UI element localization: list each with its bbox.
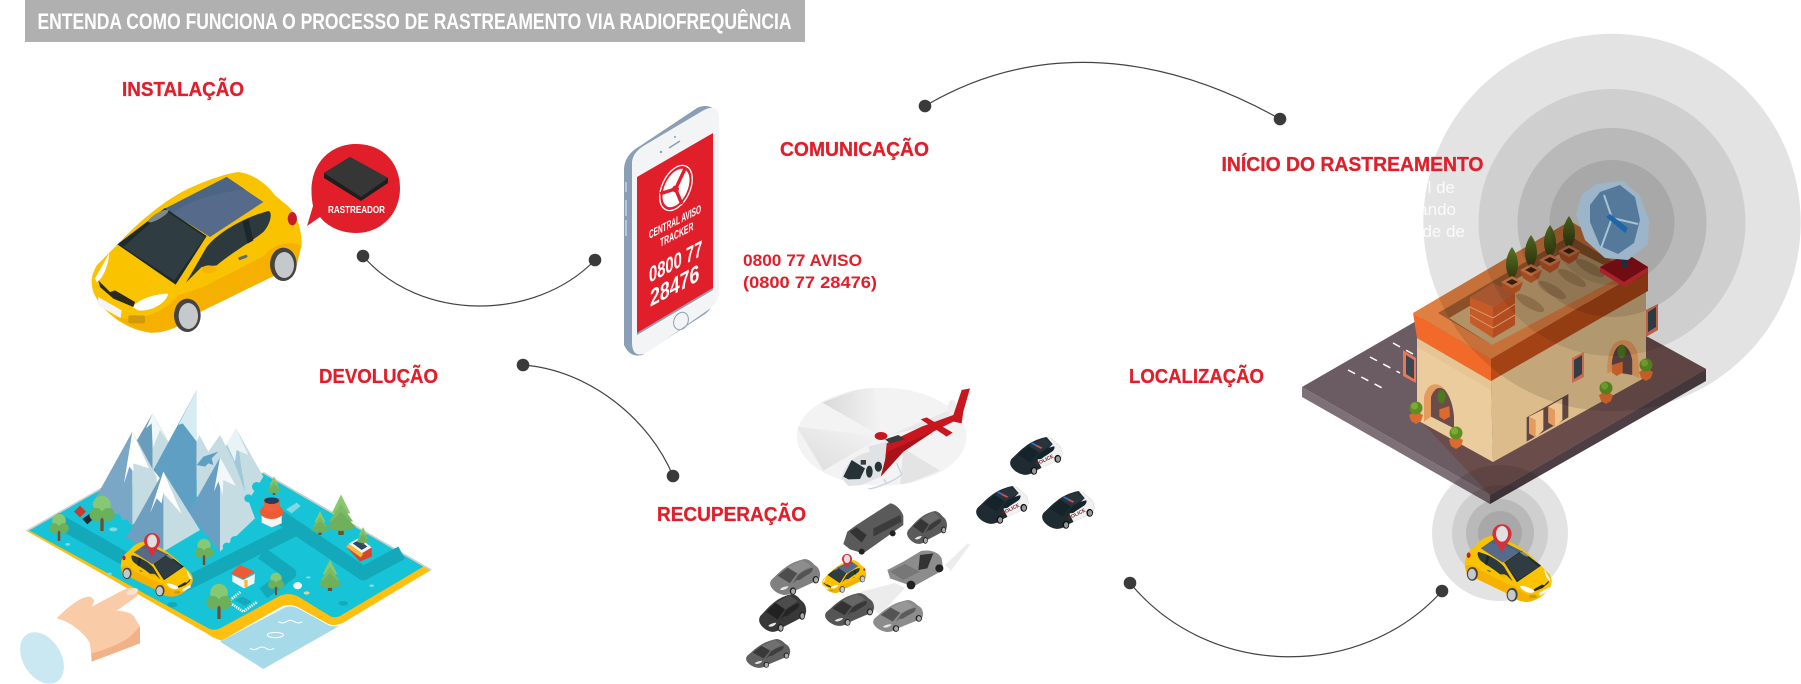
connector: instalação to comunicação	[357, 250, 601, 306]
title bar	[25, 0, 805, 42]
icon: tracker logo	[653, 160, 699, 216]
house	[231, 565, 255, 588]
phone number	[743, 251, 877, 292]
police cars	[976, 437, 1094, 529]
label: rastreador: RASTREADOR	[328, 205, 386, 216]
tail and fuselage	[881, 388, 970, 477]
roads	[55, 515, 402, 593]
icon: pointing hand	[11, 587, 140, 684]
icon: smartphone	[624, 106, 719, 356]
icon: tracker chip	[324, 157, 388, 201]
tower	[260, 497, 283, 527]
grey traffic cars	[746, 503, 947, 668]
traffic shadows	[860, 543, 970, 615]
connector: comunicação to início do rastreamento	[919, 62, 1286, 125]
icon: building with platform	[1302, 216, 1706, 504]
connector: recuperação to devolução	[517, 359, 679, 482]
faded body text on rings: l de	[1428, 178, 1455, 197]
title bar: ENTENDA COMO FUNCIONA O PROCESSO DE RASTREAMENTO VIA RADIOFREQUÊNCIA	[38, 9, 792, 34]
heading: localização: LOCALIZAÇÃO	[1129, 365, 1264, 388]
phone text: CENTRAL AVISO	[649, 203, 701, 243]
phone text: TRACKER	[660, 220, 694, 251]
phone number: (0800 77 28476)	[743, 273, 877, 292]
right arch	[1607, 340, 1639, 378]
phone text: 28476	[650, 259, 699, 312]
heading: instalação: INSTALAÇÃO	[122, 78, 244, 101]
icon: chimney	[1470, 283, 1515, 338]
rotor disc	[797, 383, 967, 487]
heading: comunicação: COMUNICAÇÃO	[780, 138, 929, 161]
left arch	[1424, 384, 1454, 428]
signal rings: located car	[1432, 465, 1568, 601]
mountains	[92, 390, 263, 552]
map base	[27, 473, 431, 669]
callout: rastreador	[307, 144, 400, 233]
small vehicles	[74, 506, 95, 524]
teal van	[286, 503, 301, 513]
illustration: helicopter	[797, 383, 970, 489]
icon: yellow car	[92, 172, 302, 333]
illustration: map with mountains	[27, 390, 431, 669]
recovered yellow car with pin	[822, 554, 866, 593]
connector: localização to rastreamento	[1124, 577, 1448, 657]
faded body text on rings: ando	[1418, 200, 1456, 219]
heading: devolução: DEVOLUÇÃO	[319, 365, 438, 388]
fence	[228, 592, 257, 612]
mountain foot scallops	[112, 482, 261, 557]
shop	[346, 538, 372, 562]
trees	[49, 476, 370, 619]
van	[843, 503, 903, 555]
door notch and columns	[1527, 394, 1568, 442]
signal rings: building	[1423, 34, 1801, 411]
heading: recuperação: RECUPERAÇÃO	[657, 503, 806, 526]
phone text	[649, 203, 702, 312]
phone text: 0800 77	[649, 236, 702, 289]
faded body text on rings: de de	[1422, 222, 1465, 241]
icon: located car with pin	[1465, 524, 1552, 602]
car on map	[121, 542, 193, 597]
pickup	[887, 550, 943, 589]
faded body text on rings	[1418, 178, 1465, 241]
icon: satellite dish	[1576, 181, 1649, 287]
ground details	[65, 527, 374, 587]
phone number: 0800 77 AVISO	[743, 251, 862, 270]
heading: início do rastreamento: INÍCIO DO RASTREAMENTO	[1222, 153, 1484, 176]
map pin	[144, 533, 160, 557]
